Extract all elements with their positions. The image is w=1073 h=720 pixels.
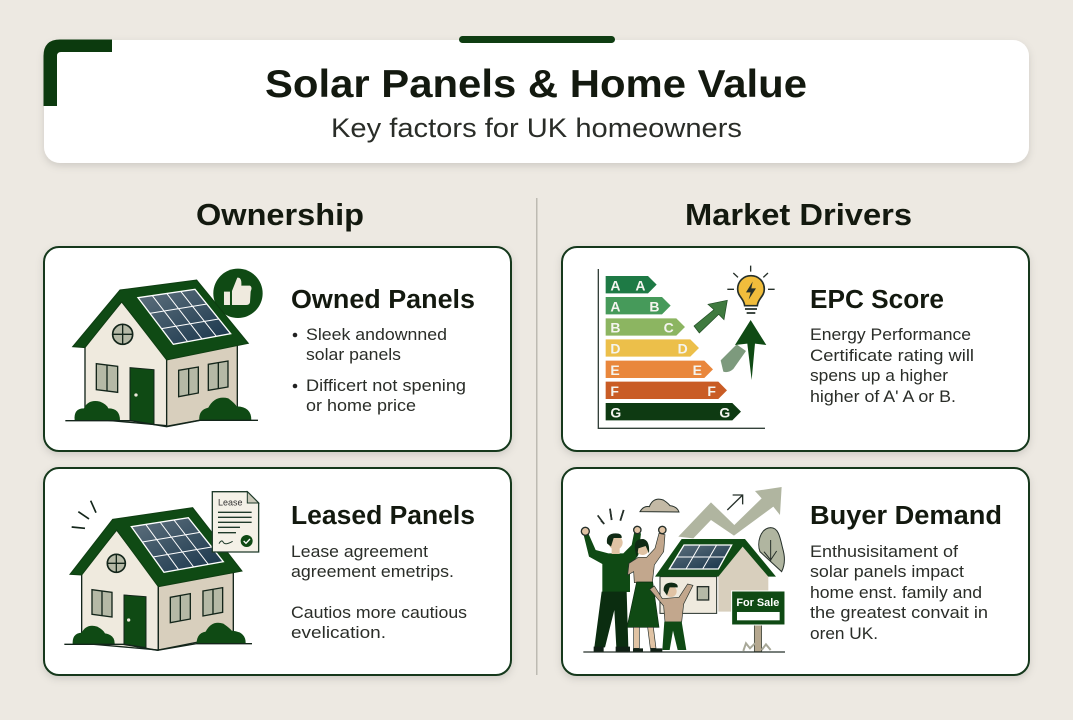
- bullet list: Difficert not spening: [306, 376, 466, 395]
- body text: [810, 542, 988, 643]
- bullet list: [293, 325, 466, 415]
- arrows up: [694, 300, 727, 333]
- heading: EPC Score: [810, 286, 944, 314]
- chart: EPC rating bars: A: [610, 298, 620, 314]
- chart: EPC rating bars: B: [649, 298, 659, 314]
- chart: EPC rating bars: F: [610, 383, 619, 399]
- panel: owned panels: [44, 247, 511, 451]
- illustration: house and for sale sign: For Sale: [736, 597, 779, 609]
- chart: EPC rating bars: G: [719, 404, 730, 420]
- body text: Cautios more cautious: [291, 603, 467, 622]
- header panel: [44, 36, 1029, 163]
- panel: leased panels: [44, 468, 511, 675]
- chart: EPC rating bars: [598, 266, 775, 428]
- bullet list: Sleek andownned: [306, 325, 447, 344]
- chart: EPC rating bars: G: [610, 404, 621, 420]
- body text: spens up a higher: [810, 366, 948, 385]
- bullet list: solar panels: [306, 345, 401, 364]
- panel: EPC score: [562, 247, 1029, 451]
- body text: Lease agreement: [291, 542, 428, 561]
- heading: Market Drivers: Market Drivers: [685, 197, 912, 232]
- chart: EPC rating bars: F: [707, 383, 716, 399]
- body text: Certificate rating will: [810, 346, 974, 365]
- body text: [291, 542, 467, 642]
- body text: higher of A' A or B.: [810, 387, 956, 406]
- icon: house with solar panels and thumbs up: [65, 269, 263, 427]
- icon: house with solar panels and lease document: [64, 492, 259, 650]
- heading: Ownership: Ownership: [196, 197, 364, 232]
- icon: lightbulb: [727, 266, 775, 313]
- bullet list: or home price: [306, 396, 416, 415]
- subtitle: Key factors for UK homeowners: [331, 113, 742, 143]
- illustration: house and for sale sign: [583, 487, 785, 652]
- body text: oren UK.: [810, 624, 878, 643]
- chart: EPC rating bars: A: [635, 277, 645, 293]
- chart: EPC rating bars: D: [610, 341, 620, 357]
- body text: solar panels impact: [810, 562, 964, 581]
- body text: Energy Performance: [810, 325, 971, 344]
- body text: the greatest convait in: [810, 603, 988, 622]
- chart: EPC rating bars: C: [664, 319, 674, 335]
- heading: Leased Panels: [291, 502, 475, 530]
- body text: Enthusisitament of: [810, 542, 958, 561]
- chart: EPC rating bars: E: [693, 362, 702, 378]
- chart: EPC rating bars: B: [610, 319, 620, 335]
- body text: agreement emetrips.: [291, 562, 454, 581]
- title: Solar Panels & Home Value: [265, 63, 807, 106]
- panel: buyer demand: [562, 468, 1029, 675]
- body text: evelication.: [291, 623, 386, 642]
- heading: Owned Panels: [291, 286, 475, 314]
- illustration: cheering family: [581, 509, 693, 652]
- heading: Buyer Demand: [810, 502, 1002, 530]
- corner accent: [44, 40, 112, 106]
- body text: home enst. family and: [810, 583, 982, 602]
- icon: house with solar panels and lease document: Lease: [218, 497, 242, 507]
- top accent bar: [459, 36, 615, 43]
- chart: EPC rating bars: D: [678, 341, 688, 357]
- body text: [810, 325, 974, 406]
- chart: EPC rating bars: A: [610, 277, 620, 293]
- chart: EPC rating bars: E: [610, 362, 620, 378]
